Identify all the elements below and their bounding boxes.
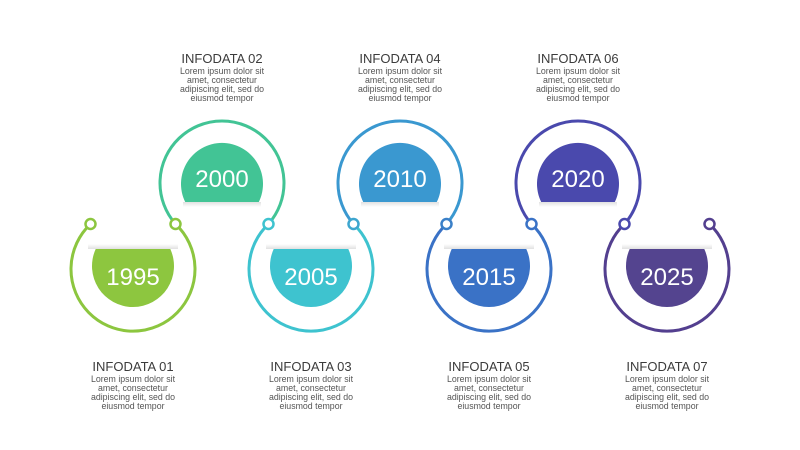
text: infodata 05 <box>447 359 532 411</box>
text: infodata 03 <box>269 359 354 411</box>
step 2025 <box>605 224 729 331</box>
text: infodata 07: Lorem ipsum dolor sit <box>625 374 710 384</box>
text: infodata 04: adipiscing elit, sed do <box>358 84 442 94</box>
text: infodata 05: INFODATA 05 <box>448 359 530 374</box>
text: infodata 03: INFODATA 03 <box>270 359 352 374</box>
text: infodata 02: amet, consectetur <box>187 75 257 85</box>
text: infodata 02: INFODATA 02 <box>181 51 263 66</box>
text: infodata 05: eiusmod tempor <box>457 401 521 411</box>
step 2010: 2010 <box>373 166 427 193</box>
text: infodata 02: eiusmod tempor <box>190 93 254 103</box>
text: infodata 03: eiusmod tempor <box>279 401 343 411</box>
text: infodata 04: eiusmod tempor <box>368 93 432 103</box>
step 2005: 2005 <box>284 264 338 291</box>
text: infodata 01: INFODATA 01 <box>92 359 174 374</box>
text: infodata 06: adipiscing elit, sed do <box>536 84 620 94</box>
text: infodata 07: eiusmod tempor <box>635 401 699 411</box>
text: infodata 06: eiusmod tempor <box>546 93 610 103</box>
text: infodata 06 <box>536 51 621 103</box>
connector dots <box>86 219 714 229</box>
text: infodata 03: Lorem ipsum dolor sit <box>269 374 354 384</box>
text: infodata 01: amet, consectetur <box>98 383 168 393</box>
step 2015 <box>427 224 551 331</box>
text: infodata 06: Lorem ipsum dolor sit <box>536 66 621 76</box>
text: infodata 02: adipiscing elit, sed do <box>180 84 264 94</box>
text: infodata 07: adipiscing elit, sed do <box>625 392 709 402</box>
text: infodata 04: amet, consectetur <box>365 75 435 85</box>
step 2000 <box>160 121 284 224</box>
text: infodata 01: Lorem ipsum dolor sit <box>91 374 176 384</box>
text: infodata 07: amet, consectetur <box>632 383 702 393</box>
text: infodata 05: Lorem ipsum dolor sit <box>447 374 532 384</box>
text: infodata 05: amet, consectetur <box>454 383 524 393</box>
text: infodata 04 <box>358 51 443 103</box>
step 2020: 2020 <box>551 166 605 193</box>
text: infodata 01: adipiscing elit, sed do <box>91 392 175 402</box>
text: infodata 07 <box>625 359 710 411</box>
text: infodata 06: amet, consectetur <box>543 75 613 85</box>
text: infodata 02 <box>180 51 265 103</box>
text: infodata 02: Lorem ipsum dolor sit <box>180 66 265 76</box>
text: infodata 07: INFODATA 07 <box>626 359 708 374</box>
step 1995: 1995 <box>106 264 160 291</box>
step 2020 <box>516 121 640 224</box>
text: infodata 04: INFODATA 04 <box>359 51 441 66</box>
text: infodata 04: Lorem ipsum dolor sit <box>358 66 443 76</box>
step 2005 <box>249 224 373 331</box>
step 2015: 2015 <box>462 264 516 291</box>
text: infodata 01: eiusmod tempor <box>101 401 165 411</box>
text: infodata 05: adipiscing elit, sed do <box>447 392 531 402</box>
step 2010 <box>338 121 462 224</box>
text: infodata 03: adipiscing elit, sed do <box>269 392 353 402</box>
step 1995 <box>71 224 195 331</box>
text: infodata 06: INFODATA 06 <box>537 51 619 66</box>
step 2025: 2025 <box>640 264 694 291</box>
text: infodata 03: amet, consectetur <box>276 383 346 393</box>
step 2000: 2000 <box>195 166 249 193</box>
text: infodata 01 <box>91 359 176 411</box>
